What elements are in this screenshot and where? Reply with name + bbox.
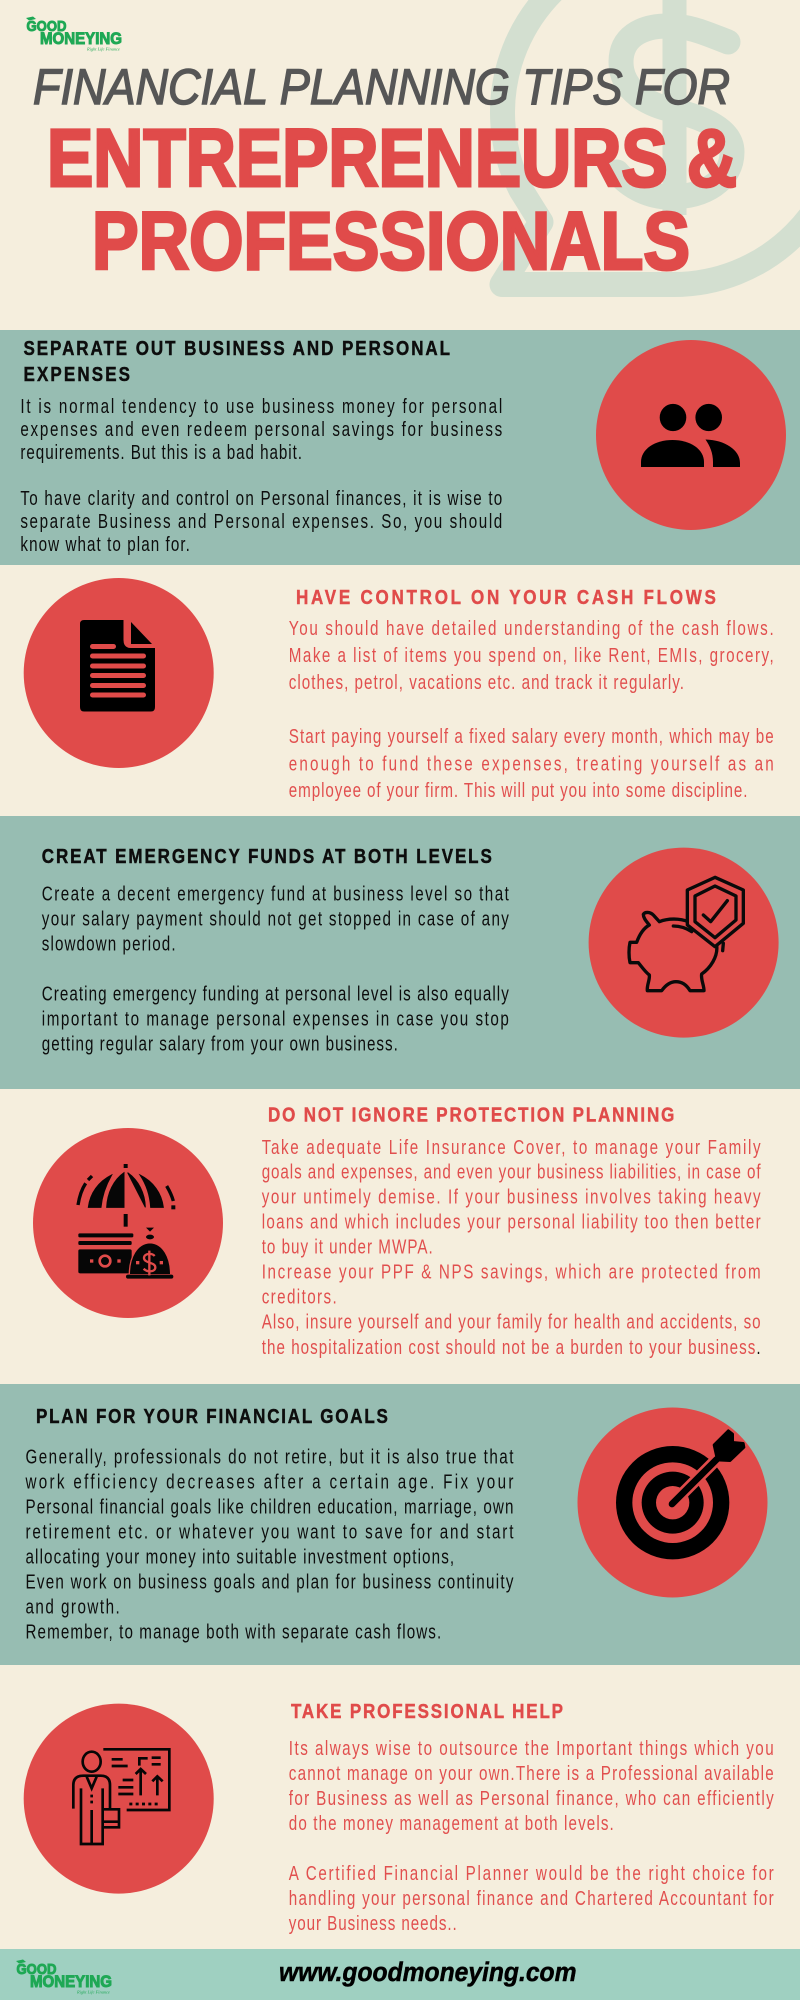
text: separate expenses body: separate Business and Personal expenses. So, you should [20, 510, 502, 533]
icon: piggy bank with shield [589, 848, 779, 1038]
text: professional help body: handling your personal finance and Chartered Accountant for [289, 1887, 774, 1910]
panel: emergency funds [0, 816, 800, 1089]
title line 3: PROFESSIONALS [92, 196, 690, 287]
header [0, 0, 800, 330]
text: protection planning body: goals and expenses, and even your business liabilities, in case of [262, 1160, 761, 1183]
icon: professional with chart board [24, 1704, 214, 1894]
text: emergency funds body: getting regular salary from your own business. [42, 1032, 398, 1055]
text: protection planning body: to buy it under MWPA. [262, 1235, 433, 1258]
icon: umbrella cash and money bag [33, 1128, 223, 1318]
heading: cash flows: HAVE CONTROL ON YOUR CASH FLOWS [296, 586, 716, 608]
text: separate expenses body: expenses and even redeem personal savings for business [20, 418, 502, 441]
text: professional help body: your Business needs.. [289, 1912, 457, 1935]
footer [0, 1949, 800, 2000]
logo: footer Good Moneying: MONEYING [30, 1973, 112, 1991]
text: financial goals body: work efficiency decreases after a certain age. Fix your [25, 1470, 513, 1493]
heading: protection planning: DO NOT IGNORE PROTECTION PLANNING [268, 1103, 674, 1126]
text: cash flows body: clothes, petrol, vacations etc. and track it regularly. [289, 671, 684, 694]
text: financial goals body: Personal financial goals like children education, marriage, own [26, 1495, 513, 1518]
text: protection planning body: the hospitalization cost should not be a burden to your business. [262, 1336, 761, 1359]
panel: professional help [0, 1665, 800, 1949]
text: protection planning body: your untimely demise. If your business involves taking heavy [262, 1185, 761, 1208]
text: protection planning body [262, 1136, 761, 1359]
text: financial goals body: retirement etc. or whatever you want to save for and start [26, 1520, 513, 1543]
text: separate expenses body [20, 395, 502, 556]
text: financial goals body: Remember, to manage both with separate cash flows. [26, 1620, 441, 1643]
text: emergency funds body: Creating emergency funding at personal level is also equally [42, 982, 509, 1005]
text: emergency funds body: your salary payment should not get stopped in case of any [42, 907, 509, 930]
text: emergency funds body: Create a decent emergency fund at business level so that [42, 882, 509, 905]
text: professional help body: do the money management at both levels. [289, 1812, 614, 1835]
heading: professional help: TAKE PROFESSIONAL HELP [291, 1700, 563, 1722]
text: separate expenses body: To have clarity and control on Personal finances, it is wise to [20, 487, 502, 510]
icon: two people [596, 340, 786, 530]
logo: Good Moneying: MONEYING [40, 30, 122, 48]
heading: separate expenses: EXPENSES [24, 363, 130, 385]
logo: Good Moneying [26, 16, 122, 52]
panel: separate expenses [0, 330, 800, 565]
text: financial goals body: allocating your money into suitable investment options, [26, 1545, 454, 1568]
text: professional help body [289, 1737, 774, 1935]
title line 1: FINANCIAL PLANNING TIPS FOR [33, 59, 730, 115]
logo: Good Moneying: Right Life Finance [86, 46, 120, 52]
panel: financial goals [0, 1384, 800, 1665]
text: protection planning body: Take adequate Life Insurance Cover, to manage your Family [262, 1136, 761, 1159]
text: cash flows body: You should have detailed understanding of the cash flows. [289, 617, 774, 640]
text: professional help body: Its always wise to outsource the Important things which you [289, 1737, 774, 1760]
icon: document [24, 578, 214, 768]
text: protection planning body: Also, insure yourself and your family for health and accidents, so [262, 1310, 761, 1333]
text: protection planning body: creditors. [262, 1285, 337, 1308]
heading: emergency funds: CREAT EMERGENCY FUNDS AT BOTH LEVELS [42, 845, 492, 867]
text: financial goals body: Generally, professionals do not retire, but it is also true that [26, 1445, 513, 1468]
text: cash flows body: Make a list of items you spend on, like Rent, EMIs, grocery, [289, 644, 774, 667]
heading: separate expenses [24, 337, 450, 385]
panel: protection planning [0, 1089, 800, 1384]
logo: footer Good Moneying: Right Life Finance [76, 1990, 110, 1994]
text: financial goals body: Even work on business goals and plan for business continuity [26, 1570, 514, 1593]
heading: separate expenses: SEPARATE OUT BUSINESS AND PERSONAL [24, 337, 450, 359]
text: emergency funds body [42, 882, 509, 1055]
heading: financial goals: PLAN FOR YOUR FINANCIAL GOALS [36, 1405, 388, 1427]
text: professional help body: cannot manage on your own.There is a Professional available [289, 1762, 774, 1785]
logo: Good Moneying: GOOD [26, 18, 67, 35]
text: cash flows body: employee of your firm. This will put you into some discipline. [289, 779, 747, 802]
panel: cash flows [0, 565, 800, 816]
text: separate expenses body: requirements. But this is a bad habit. [20, 441, 302, 464]
logo: footer Good Moneying [16, 1960, 112, 1994]
text: cash flows body: enough to fund these expenses, treating yourself as an [289, 752, 774, 775]
text: protection planning body: loans and which includes your personal liability too then better [262, 1210, 761, 1233]
text: separate expenses body: It is normal tendency to use business money for personal [20, 395, 502, 418]
icon: watermark dollar speech bubble [502, 0, 800, 284]
text: professional help body: for Business as well as Personal finance, who can efficiently [289, 1787, 774, 1810]
website address: www.goodmoneying.com [279, 1957, 576, 1987]
text: emergency funds body: slowdown period. [42, 932, 176, 955]
icon: target with arrow [578, 1408, 768, 1598]
text: financial goals body [25, 1445, 514, 1643]
text: separate expenses body: know what to plan for. [20, 533, 190, 556]
text: protection planning body: Increase your PPF & NPS savings, which are protected from [262, 1260, 761, 1283]
text: emergency funds body: important to manage personal expenses in case you stop [42, 1007, 509, 1030]
logo: footer Good Moneying: GOOD [16, 1961, 57, 1978]
text: financial goals body: and growth. [26, 1595, 120, 1618]
text: cash flows body [289, 617, 774, 802]
text: cash flows body: Start paying yourself a fixed salary every month, which may be [289, 725, 774, 748]
text: professional help body: A Certified Financial Planner would be the right choice for [289, 1862, 774, 1885]
